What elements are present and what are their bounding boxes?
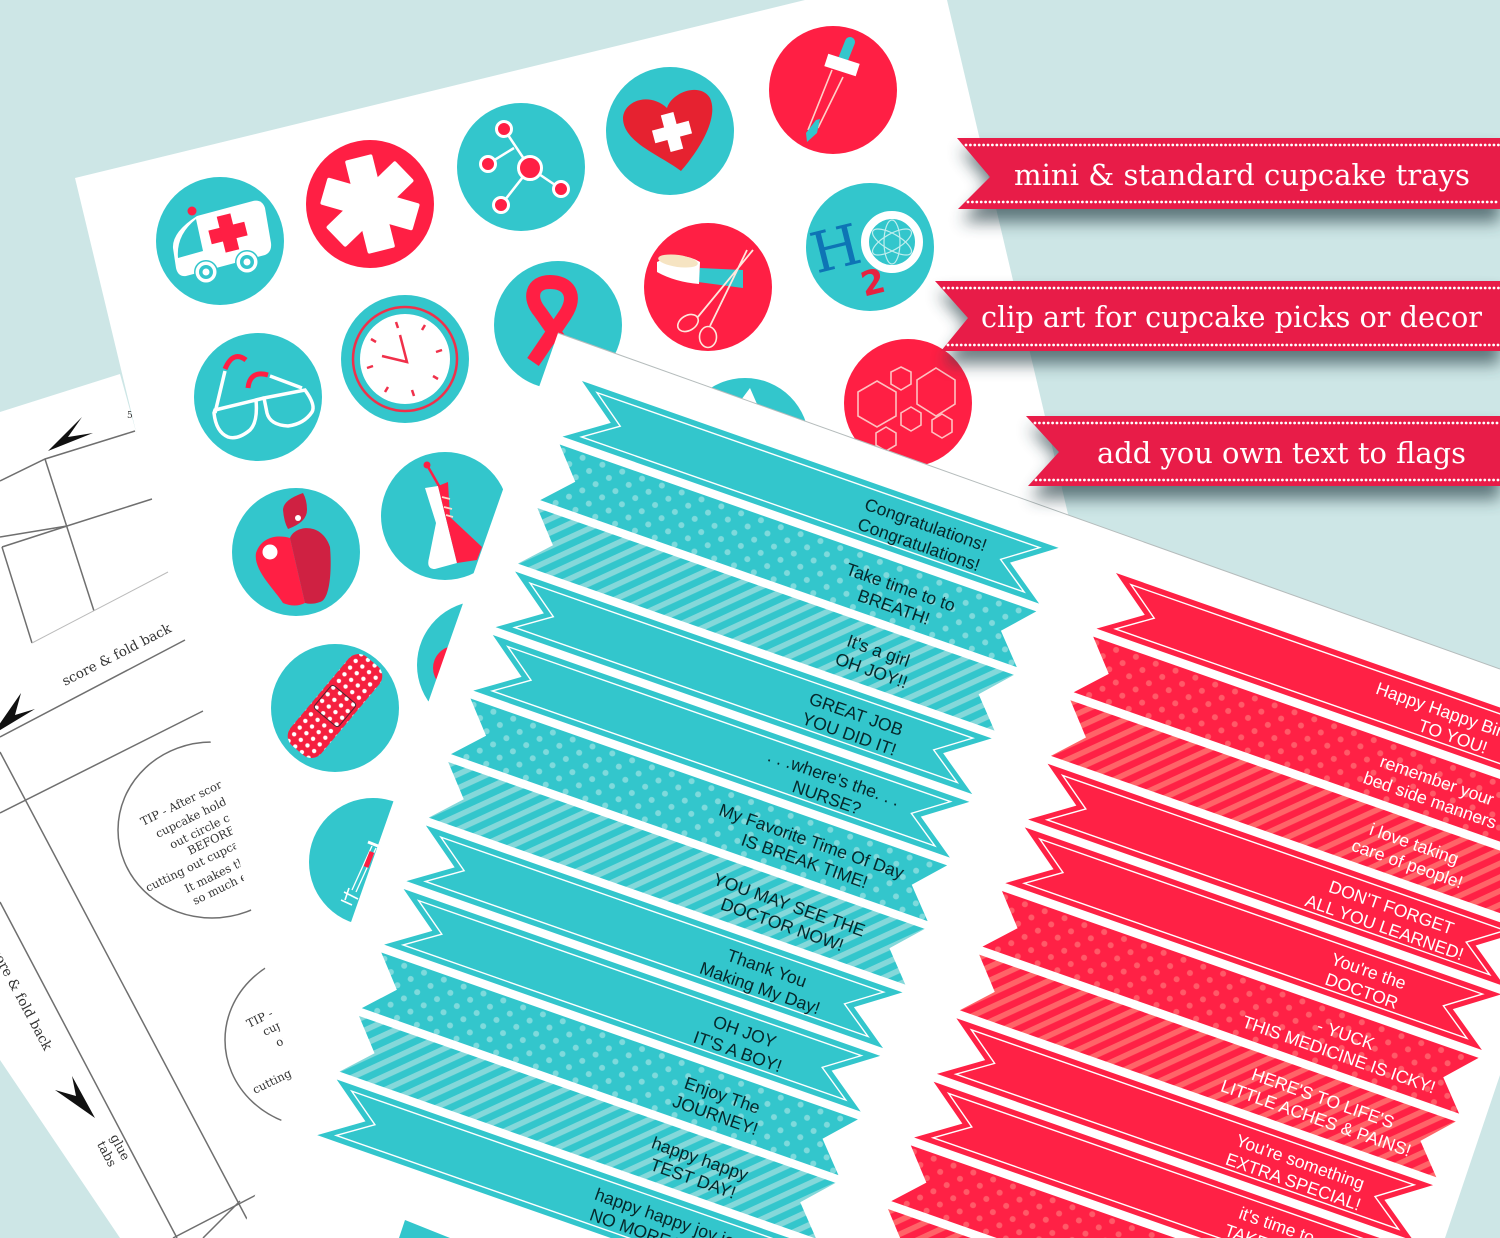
tip text block one: TIP - After scoring <box>138 769 241 829</box>
red flag 8: Extra special: EXTRA SPECIAL! <box>1223 1149 1363 1215</box>
icon: H2O: H <box>804 212 867 287</box>
banner: add you own text to flags: add you own text to flags <box>1097 437 1466 470</box>
teal flag 5: Nurse: . . .where's the. . . <box>765 745 902 810</box>
teal flag 2: Take time: Take time to to <box>843 559 958 616</box>
teal flag 9: It's a boy: IT'S A BOY! <box>691 1027 785 1076</box>
tip text block two: cutting out <box>250 1056 314 1097</box>
red flag 3: I love taking care: care of people! <box>1349 835 1466 892</box>
icon: flask <box>381 452 509 580</box>
red flag 7: Life's little aches <box>960 955 1456 1177</box>
teal flag 1: Congratulations: Congratulations! <box>855 514 983 575</box>
teal flag 11: Test day: TEST DAY! <box>648 1154 738 1203</box>
red flag 4: Don't forget <box>1028 764 1500 986</box>
teal flag 2: Take time: BREATH! <box>855 585 932 629</box>
tip text block one: so much easier <box>190 856 276 908</box>
teal flag 3: It's a girl <box>518 508 1014 731</box>
icon: H2O: 2 <box>857 261 889 305</box>
tip text block one: cutting out cupcake <box>143 831 254 895</box>
teal flag 4: Great job: GREAT JOB <box>806 689 906 740</box>
teal flag 6: Break time: My Favorite Time Of Day <box>716 800 907 883</box>
red flag 2: Bed side manners: bed side manners <box>1361 768 1500 833</box>
teal flag 12: No more <box>317 1080 813 1238</box>
teal flag 11: Test day: happy happy <box>649 1133 751 1185</box>
tip text block one <box>138 769 276 908</box>
red flag 1: Happy birthday: TO YOU! <box>1416 715 1490 758</box>
tip text block two: out <box>273 1029 297 1050</box>
tip text block two: TIP - After <box>244 991 305 1031</box>
icon: H2O <box>804 183 934 311</box>
red flag 4: Don't forget: DON'T FORGET <box>1326 876 1457 939</box>
template sheets: score and fold lines <box>0 374 415 1238</box>
red flag 2: Bed side manners <box>1074 637 1500 859</box>
red flag 7: Life's little aches: HERE'S TO LIFE'S <box>1249 1064 1397 1133</box>
red flag 6: Yuck medicine <box>982 891 1479 1114</box>
teal flag 1: Congratulations <box>562 381 1059 604</box>
icon: partly hidden red badge <box>417 601 545 729</box>
icon: clock <box>341 295 469 423</box>
icon: medical star <box>306 140 434 268</box>
red flag 5: You're the doctor: DOCTOR <box>1323 969 1401 1013</box>
banner: add you own text to flags <box>1026 416 1500 499</box>
teal flag 3: It's a girl: It's a girl <box>844 631 912 671</box>
red flag 2: Bed side manners: remember your <box>1377 751 1497 810</box>
red flag 9: Time to take <box>914 1082 1410 1238</box>
icon: partly hidden badge <box>681 378 809 506</box>
icon: hexagons <box>844 339 972 467</box>
teal flag 5: Nurse: NURSE? <box>790 776 864 819</box>
red flag 7: Life's little aches: LITTLE ACHES & PAINS! <box>1218 1076 1414 1161</box>
red flag 8: Extra special: You're something <box>1233 1130 1367 1194</box>
teal flag 8: Thank you: Thank You <box>724 945 809 991</box>
teal flag 10: Enjoy the journey: JOURNEY! <box>670 1091 761 1139</box>
banner: clip art for cupcake picks or decor: clip art for cupcake picks or decor <box>981 301 1482 334</box>
icon: dropper <box>769 26 897 154</box>
teal flag 8: Thank you: Making My Day! <box>697 958 823 1018</box>
icon: glasses <box>194 333 322 461</box>
tip text block one: It makes this <box>182 850 256 896</box>
teal flag 6: Break time: IS BREAK TIME! <box>739 830 870 892</box>
teal flag 1: Congratulations: Congratulations! <box>862 494 990 555</box>
icon: syringe <box>309 798 437 926</box>
banner: clip art for cupcake picks or decor <box>935 281 1500 364</box>
icon: ambulance <box>156 177 284 305</box>
teal flag 7: See the doctor <box>429 762 925 985</box>
icon: bandage <box>271 644 399 772</box>
tip text block two: cupcake <box>260 1005 310 1039</box>
tip text block two <box>244 991 314 1097</box>
teal flag 6: Break time <box>451 698 947 921</box>
teal flag 4: Great job: YOU DID IT! <box>799 708 899 760</box>
red flag 5: You're the doctor <box>1005 827 1500 1050</box>
red flag 10: dotted <box>891 1145 1387 1238</box>
red flag 6: Yuck medicine: THIS MEDICINE IS ICKY! <box>1240 1011 1438 1098</box>
red flag 8: Extra special <box>937 1018 1433 1238</box>
teal flag 8: Thank you <box>406 826 903 1048</box>
teal flag 3: It's a girl: OH JOY!! <box>833 649 910 692</box>
red flag 6: Yuck medicine: - YUCK <box>1315 1015 1377 1054</box>
teal flag 9: It's a boy <box>384 889 880 1112</box>
banner: mini and standard cupcake trays: mini & standard cupcake trays <box>1014 159 1470 192</box>
icon: fold arrow 3 <box>55 1076 95 1118</box>
icon: tape and scissors <box>644 223 772 351</box>
teal flag 10: Enjoy the journey <box>362 952 858 1175</box>
teal flag 7: See the doctor: DOCTOR NOW! <box>718 894 846 955</box>
red flag 3: I love taking care <box>1051 700 1500 923</box>
banner: mini and standard cupcake trays <box>957 138 1500 222</box>
tip text block one: out circle cupcake <box>167 792 270 852</box>
red flag 3: I love taking care: i love taking <box>1367 819 1461 869</box>
teal flag 5: Nurse <box>473 635 969 858</box>
icon: apple <box>232 488 360 616</box>
panel: clip art sheet <box>75 0 1100 1238</box>
icon: molecule <box>457 103 585 231</box>
red flag 11: striped <box>868 1209 1365 1238</box>
teal flag 2: Take time <box>540 444 1036 667</box>
icon: fold arrow 2 <box>0 693 35 735</box>
teal flag 4: Great job <box>496 572 992 794</box>
red flag 1: Happy birthday <box>1096 573 1500 796</box>
label: glue tabs: glue <box>107 1131 133 1163</box>
red flag 4: Don't forget: ALL YOU LEARNED! <box>1303 890 1466 964</box>
icon: fold arrow 1 <box>48 417 93 451</box>
teal flag 11: Test day <box>339 1016 836 1238</box>
icon: heart with cross <box>606 67 734 195</box>
tip text block one: cupcake holder, cut <box>153 778 262 841</box>
icon: ribbon <box>494 261 622 389</box>
panel: flag sheet <box>240 333 1500 1238</box>
red flag 5: You're the doctor: You're the <box>1328 949 1409 993</box>
teal flag 7: See the doctor: YOU MAY SEE THE <box>711 869 868 940</box>
tip text block one: BEFORE <box>185 823 237 858</box>
teal flag 10: Enjoy the journey: Enjoy The <box>682 1073 763 1118</box>
label: small sheet mark: 5 <box>127 411 133 421</box>
label: glue tabs: tabs <box>94 1138 120 1169</box>
label: score and fold back top: score & fold back <box>60 620 175 690</box>
teal flag 9: It's a boy: OH JOY <box>710 1011 779 1052</box>
